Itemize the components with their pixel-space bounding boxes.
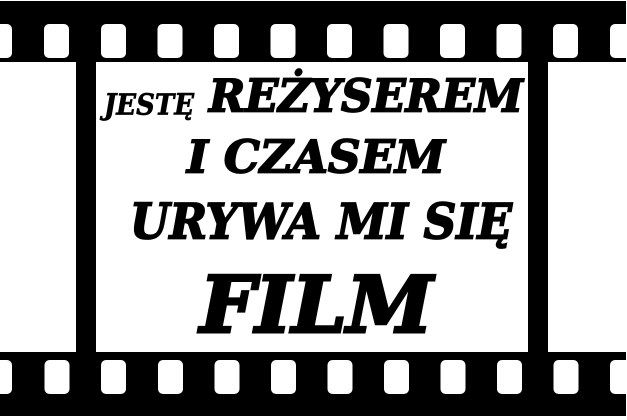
slogan text — [100, 68, 524, 351]
text: URYWA MI SIĘ: URYWA MI SIĘ — [130, 192, 513, 250]
text: I CZASEM: I CZASEM — [185, 130, 446, 184]
text: JESTĘ: JESTĘ — [100, 88, 195, 122]
film strip: top band with perforations — [0, 1, 627, 62]
frame divider: left — [76, 60, 96, 354]
film strip: bottom band with perforations — [0, 352, 627, 416]
text: REŻYSEREM: REŻYSEREM — [207, 68, 524, 122]
text: FILM: FILM — [198, 260, 436, 351]
frame divider: right — [528, 60, 548, 354]
